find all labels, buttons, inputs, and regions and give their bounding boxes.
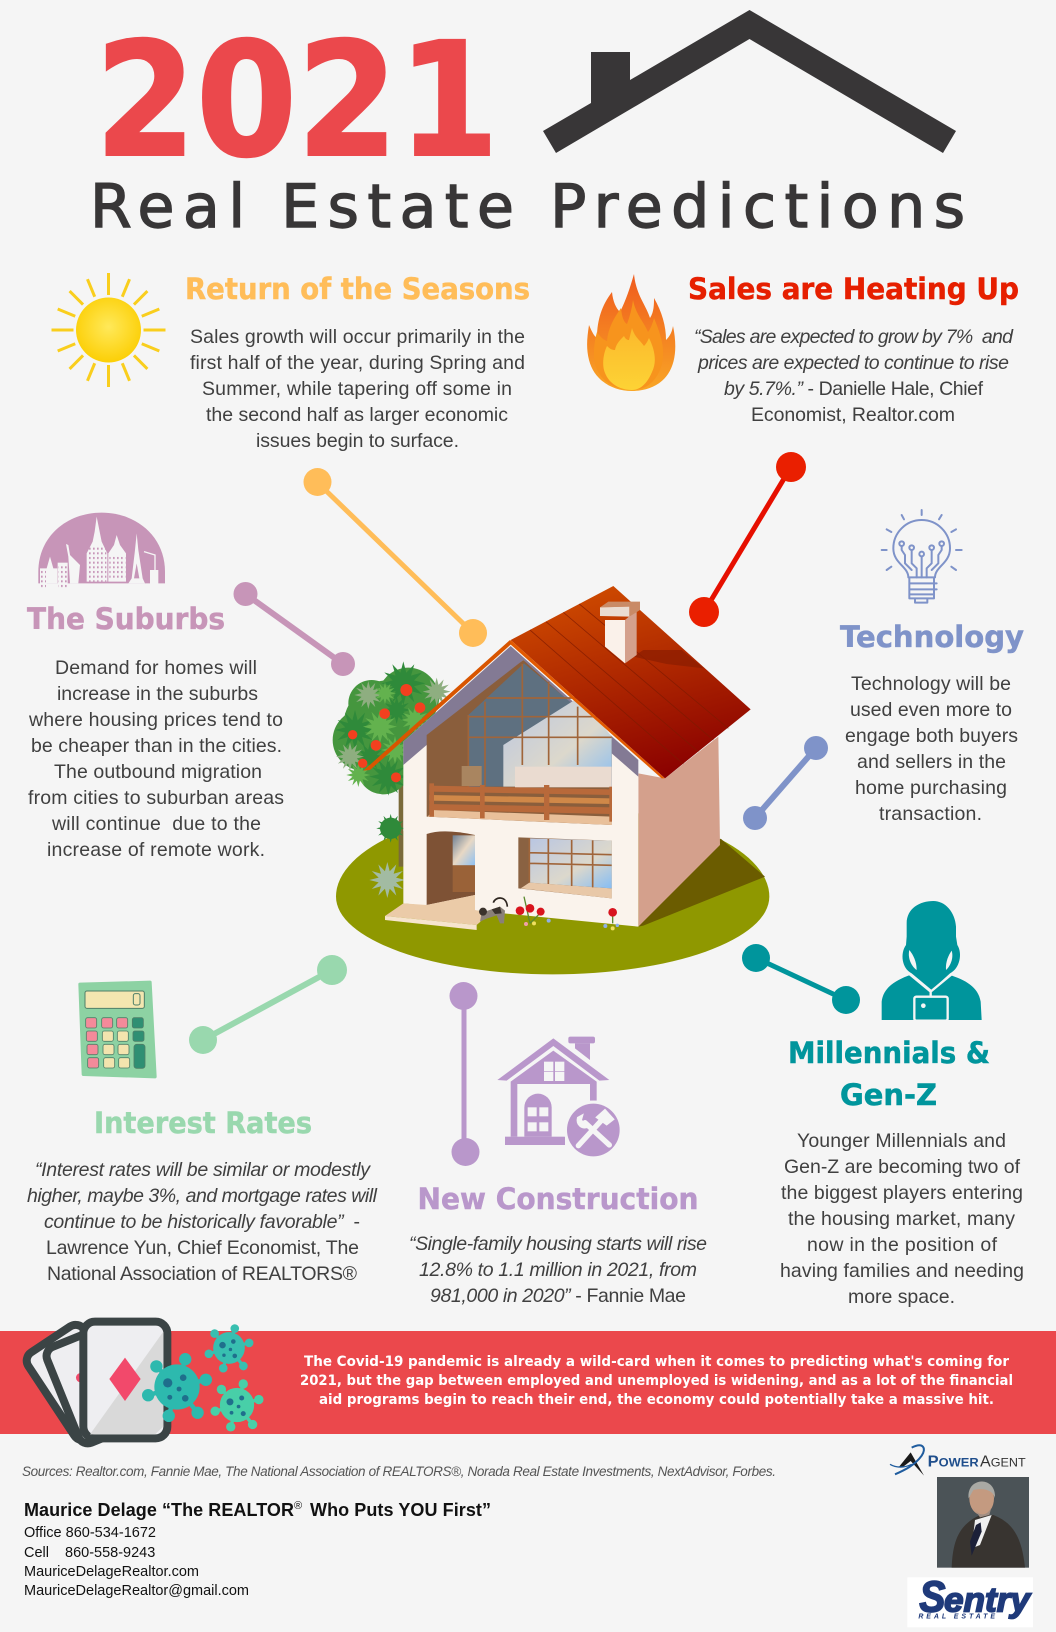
icon: calculator bbox=[80, 982, 155, 1077]
text: covid note bbox=[300, 1354, 1013, 1408]
text: sales are heating up: prices are expected to continue to rise bbox=[697, 352, 1009, 374]
icon: sun bbox=[52, 273, 166, 387]
text: interest rates: Lawrence Yun, Chief Economist, The bbox=[46, 1237, 359, 1259]
upper recess bbox=[427, 660, 612, 825]
heading: new construction: New Construction bbox=[418, 1182, 698, 1216]
text: the suburbs: where housing prices tend to bbox=[28, 709, 283, 731]
text: return of the seasons: Sales growth will occur primarily in the bbox=[190, 326, 525, 348]
text: new construction: “Single-family housing starts will rise bbox=[409, 1233, 707, 1255]
logo: power agent: AGENT bbox=[980, 1453, 1026, 1470]
gable soffit bbox=[403, 646, 638, 777]
heading: the suburbs: The Suburbs bbox=[27, 602, 225, 636]
text: covid note: aid programs begin to reach their end, the economy could potentially take a massive hit. bbox=[319, 1392, 994, 1408]
text: return of the seasons: issues begin to surface. bbox=[256, 430, 459, 452]
cat bbox=[479, 898, 507, 923]
panel: covid banner bbox=[0, 1321, 1056, 1446]
text: the suburbs: Demand for homes will bbox=[55, 657, 257, 679]
text: interest rates: National Association of REALTORS® bbox=[47, 1263, 358, 1285]
chimney bbox=[605, 620, 625, 663]
text: sales are heating up: by 5.7%.” - Danielle Hale, Chief bbox=[724, 378, 984, 400]
tree bbox=[333, 661, 451, 898]
logo: sentry real estate bbox=[907, 1574, 1033, 1627]
text: return of the seasons bbox=[190, 326, 525, 452]
heading: technology: Technology bbox=[840, 620, 1024, 654]
text: the suburbs: increase of remote work. bbox=[47, 839, 265, 861]
icon: roof bbox=[543, 10, 956, 153]
text: millennials and gen-z bbox=[780, 1130, 1024, 1308]
text: millennials and gen-z: having families and needing bbox=[780, 1260, 1024, 1282]
text: return of the seasons: Summer, while tapering off some in bbox=[202, 378, 512, 400]
text: the suburbs bbox=[28, 657, 284, 861]
panel: return of the seasons bbox=[52, 272, 530, 452]
text: millennials and gen-z: the housing market, many bbox=[788, 1208, 1015, 1230]
logo: sentry real estate: S bbox=[919, 1574, 945, 1622]
contact details: 860-558-9243 bbox=[65, 1545, 155, 1561]
text: the suburbs: from cities to suburban areas bbox=[28, 787, 284, 809]
panel: sales are heating up bbox=[587, 272, 1019, 426]
text: technology: engage both buyers bbox=[845, 725, 1018, 747]
heading: millennials and gen-z: Gen-Z bbox=[840, 1078, 937, 1112]
text: the suburbs: be cheaper than in the cities. bbox=[31, 735, 282, 757]
balcony bbox=[428, 810, 612, 825]
icon: person with tablet bbox=[880, 901, 983, 1022]
text: new construction: 12.8% to 1.1 million in 2021, from bbox=[419, 1259, 697, 1281]
text: sales are heating up: “Sales are expected to grow by 7% and bbox=[694, 326, 1014, 348]
contact details: Maurice Delage “The REALTOR bbox=[24, 1500, 294, 1520]
logo: sentry real estate: REAL ESTATE bbox=[918, 1614, 995, 1621]
icon: viruses bbox=[142, 1324, 264, 1432]
text: technology: home purchasing bbox=[855, 777, 1007, 799]
text: millennials and gen-z: Younger Millennials and bbox=[797, 1130, 1006, 1152]
banner band bbox=[0, 1331, 1056, 1434]
icon: flame bbox=[587, 274, 675, 391]
panel: interest rates bbox=[27, 982, 378, 1285]
illustration: house bbox=[333, 586, 769, 974]
heading: millennials and gen-z bbox=[788, 1036, 990, 1112]
logo: sentry real estate: entry bbox=[944, 1582, 1032, 1620]
flowers bbox=[516, 897, 619, 930]
contact details: Cell bbox=[24, 1545, 49, 1561]
text: technology: Technology will be bbox=[851, 673, 1011, 695]
text: new construction bbox=[409, 1233, 707, 1307]
connector: interest rates bbox=[189, 955, 347, 1054]
sources: Sources: Realtor.com, Fannie Mae, The National Association of REALTORS®, Norada Real Estate Investments, NextAdvisor, Forbes. bbox=[22, 1464, 776, 1479]
text: millennials and gen-z: Gen-Z are becoming two of bbox=[784, 1156, 1021, 1178]
logo: power agent: POWER bbox=[928, 1453, 979, 1470]
contact details bbox=[24, 1500, 491, 1599]
text: technology bbox=[845, 673, 1018, 825]
text: sales are heating up: Economist, Realtor.com bbox=[751, 404, 955, 426]
heading: return of the seasons: Return of the Seasons bbox=[185, 272, 530, 306]
icon: playing cards bbox=[23, 1321, 167, 1446]
text: the suburbs: increase in the suburbs bbox=[57, 683, 258, 705]
icon: house under construction bbox=[497, 1037, 623, 1159]
contact details: Who Puts YOU First” bbox=[310, 1500, 491, 1520]
heading: interest rates: Interest Rates bbox=[94, 1106, 312, 1140]
text: new construction: 981,000 in 2020” - Fannie Mae bbox=[430, 1285, 686, 1307]
heading: sales are heating up: Sales are Heating Up bbox=[688, 272, 1019, 306]
contact details: ® bbox=[294, 1500, 302, 1512]
text: interest rates: “Interest rates will be similar or modestly bbox=[35, 1159, 371, 1181]
panel: the suburbs bbox=[27, 513, 284, 861]
front wall bbox=[403, 646, 638, 927]
text: interest rates: higher, maybe 3%, and mortgage rates will bbox=[27, 1185, 378, 1207]
connector: millennials bbox=[742, 944, 860, 1014]
text: covid note: The Covid-19 pandemic is already a wild-card when it comes to predicting what's coming for bbox=[304, 1354, 1009, 1370]
text: the suburbs: The outbound migration bbox=[54, 761, 262, 783]
roof bbox=[511, 586, 751, 778]
text: interest rates bbox=[27, 1159, 378, 1285]
side wall bbox=[638, 737, 720, 927]
panel: technology bbox=[840, 510, 1024, 825]
icon: lightbulb bbox=[882, 510, 962, 603]
logos and portrait bbox=[890, 1445, 1033, 1627]
title bbox=[90, 9, 965, 242]
connector: suburbs bbox=[234, 582, 355, 676]
window frames bbox=[468, 664, 612, 787]
connector: technology bbox=[743, 736, 828, 830]
panel: millennials and gen-z bbox=[780, 901, 1024, 1308]
icon: city skyline dome bbox=[38, 513, 165, 590]
lower window bbox=[518, 837, 612, 898]
text: return of the seasons: first half of the year, during Spring and bbox=[190, 352, 525, 374]
heading: millennials and gen-z: Millennials & bbox=[788, 1036, 990, 1070]
contact details: MauriceDelageRealtor@gmail.com bbox=[24, 1583, 249, 1599]
contact details: MauriceDelageRealtor.com bbox=[24, 1564, 199, 1580]
contact details: Office 860-534-1672 bbox=[24, 1525, 156, 1541]
text: the suburbs: will continue due to the bbox=[51, 813, 261, 835]
connector: new construction bbox=[450, 982, 480, 1166]
title subtitle: Real Estate Predictions bbox=[90, 172, 965, 242]
title year 2021: 2021 bbox=[95, 9, 499, 193]
connector: seasons bbox=[304, 468, 487, 647]
text: return of the seasons: the second half as larger economic bbox=[206, 404, 508, 426]
text: sales are heating up bbox=[694, 326, 1014, 426]
text: technology: used even more to bbox=[850, 699, 1012, 721]
lawn bbox=[336, 806, 769, 974]
connector: sales bbox=[689, 452, 806, 627]
text: millennials and gen-z: more space. bbox=[848, 1286, 955, 1308]
porch bbox=[385, 895, 490, 925]
text: technology: transaction. bbox=[879, 803, 982, 825]
door bbox=[427, 831, 475, 905]
panel: new construction bbox=[409, 1037, 707, 1307]
text: millennials and gen-z: now in the position of bbox=[807, 1234, 998, 1256]
text: interest rates: continue to be historically favorable” - bbox=[44, 1211, 360, 1233]
text: covid note: 2021, but the gap between employed and unemployed is widening, and as a lot of the financial bbox=[300, 1373, 1013, 1389]
logo: power agent bbox=[890, 1445, 1026, 1476]
text: millennials and gen-z: the biggest players entering bbox=[781, 1182, 1023, 1204]
portrait photo bbox=[937, 1477, 1029, 1568]
text: technology: and sellers in the bbox=[857, 751, 1006, 773]
